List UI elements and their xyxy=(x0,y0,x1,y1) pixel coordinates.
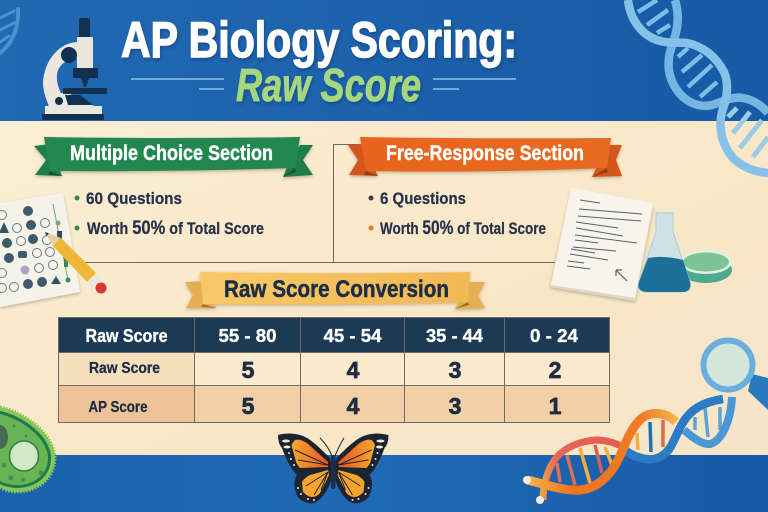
table header row xyxy=(86,326,578,346)
icon: green cell xyxy=(0,407,55,492)
list: free response facts: Worth 50% of Total Score xyxy=(380,218,546,239)
table: score conversion xyxy=(58,317,610,423)
table header row: 55 - 80 xyxy=(218,326,276,346)
table row: raw score xyxy=(89,357,561,383)
table row: raw score: 3 xyxy=(449,357,461,383)
butterfly left wings xyxy=(278,434,332,503)
table header row: 35 - 44 xyxy=(426,326,483,346)
icon: pencil xyxy=(45,232,106,294)
butterfly right wings xyxy=(334,434,388,503)
panel frame lines xyxy=(80,144,555,262)
table row: AP score: 3 xyxy=(449,393,461,419)
top blue header band xyxy=(0,0,768,121)
icon: magnifying glass xyxy=(704,340,768,410)
table row: AP score: AP Score xyxy=(88,399,148,416)
list: free response facts: 6 Questions xyxy=(380,190,466,208)
icon: faint DNA top left xyxy=(0,9,18,53)
icon: butterfly xyxy=(278,434,388,503)
heading: free response: Free-Response Section xyxy=(386,142,584,165)
table row: AP score: 1 xyxy=(549,393,562,419)
table row: raw score: 2 xyxy=(549,357,561,383)
subtitle: Raw Score xyxy=(236,59,421,111)
heading: raw score conversion: Raw Score Conversion xyxy=(224,276,449,303)
title accent lines xyxy=(131,79,516,89)
table row: AP score: 5 xyxy=(242,393,255,419)
table header row: 0 - 24 xyxy=(530,326,578,346)
list: multiple choice facts xyxy=(74,190,264,239)
ribbon: free response xyxy=(348,137,622,177)
table row: raw score: Raw Score xyxy=(89,360,160,377)
table header row: Raw Score xyxy=(86,326,168,346)
list: multiple choice facts: Worth 50% of Total Score xyxy=(87,218,264,239)
table row: AP score: 4 xyxy=(347,393,360,419)
ribbon: multiple choice xyxy=(34,137,313,177)
list: multiple choice facts: 60 Questions xyxy=(86,190,182,208)
heading: multiple choice: Multiple Choice Section xyxy=(70,142,273,165)
icon: response paper xyxy=(550,188,653,301)
icon: flask xyxy=(638,213,690,292)
list: free response facts xyxy=(368,190,546,239)
icon: answer sheet xyxy=(0,193,80,307)
icon: petri dish xyxy=(680,250,732,283)
ribbon: raw score conversion xyxy=(185,272,485,309)
table row: raw score: 4 xyxy=(347,357,360,383)
table row: raw score: 5 xyxy=(242,357,255,383)
title: AP Biology Scoring: xyxy=(121,12,517,68)
icon: colourful DNA helix xyxy=(523,397,732,504)
bottom blue band xyxy=(0,455,768,512)
icon: DNA top right xyxy=(628,0,768,173)
icon: microscope xyxy=(42,18,107,120)
table header row: 45 - 54 xyxy=(324,326,382,346)
table row: AP score xyxy=(88,393,562,419)
cream background xyxy=(0,118,768,458)
